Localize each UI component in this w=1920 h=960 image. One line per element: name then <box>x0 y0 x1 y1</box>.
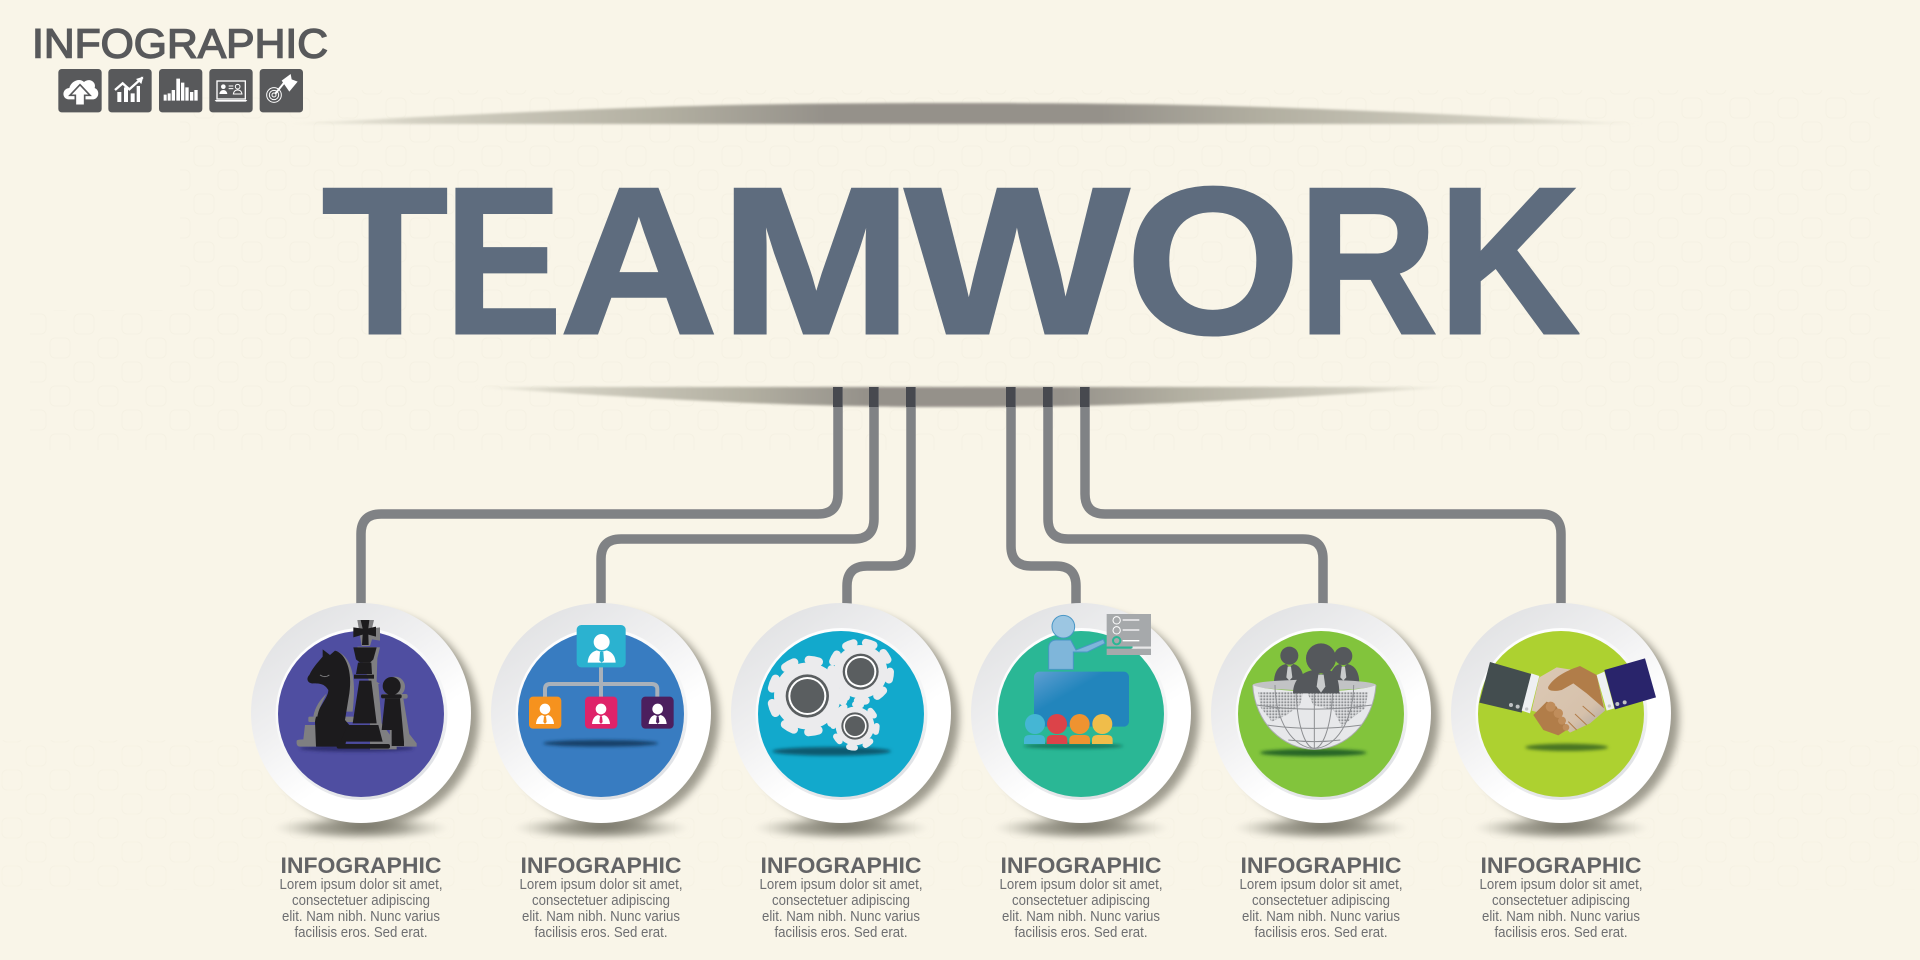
circle 5: global team <box>1211 603 1439 841</box>
title: TEAMWORK: A <box>560 145 718 378</box>
caption 1: Lorem ipsum dolor sit amet, <box>280 877 442 893</box>
top box <box>577 625 626 667</box>
icon: handshake <box>1479 658 1656 751</box>
pipe to circle 4 <box>1011 387 1076 606</box>
half globe <box>1252 680 1376 750</box>
caption 4: INFOGRAPHIC <box>1000 853 1162 878</box>
caption 5: INFOGRAPHIC <box>1240 853 1402 878</box>
caption 4: facilisis eros. Sed erat. <box>1014 925 1148 941</box>
caption 6: INFOGRAPHIC <box>1480 853 1642 878</box>
connector pipes <box>361 387 1561 606</box>
caption 1: facilisis eros. Sed erat. <box>294 925 428 941</box>
audience <box>1024 714 1113 744</box>
circle 1: strategy chess <box>251 603 479 841</box>
caption 2 <box>520 853 682 941</box>
icon: laptop presentation <box>209 69 253 112</box>
caption 4: Lorem ipsum dolor sit amet, <box>1000 877 1162 893</box>
caption 5: facilisis eros. Sed erat. <box>1254 925 1388 941</box>
icon: chess pieces <box>297 620 417 752</box>
checklist board <box>1107 614 1151 655</box>
caption 4: elit. Nam nibh. Nunc varius <box>1002 909 1160 925</box>
pipe to circle 1 <box>361 387 838 606</box>
icon: presenter and audience <box>1023 614 1151 749</box>
caption 5: consectetuer adipiscing <box>1252 893 1390 909</box>
caption 2: facilisis eros. Sed erat. <box>534 925 668 941</box>
gear lower <box>833 704 877 748</box>
caption 2: INFOGRAPHIC <box>520 853 682 878</box>
icon: org chart <box>529 625 674 747</box>
orange box <box>529 697 561 729</box>
caption 3 <box>760 853 922 941</box>
gear large <box>771 660 843 732</box>
circle 4: presentation <box>971 603 1199 841</box>
icon: growth chart <box>108 69 152 112</box>
icon: three gears <box>771 642 891 756</box>
logo: INFOGRAPHIC wordmark: INFOGRAPHIC <box>32 20 328 66</box>
left sleeve <box>1479 662 1539 713</box>
icon: target with arrow <box>260 69 303 112</box>
caption 3: elit. Nam nibh. Nunc varius <box>762 909 920 925</box>
circle 2: organisation chart <box>491 603 719 841</box>
title: TEAMWORK: W <box>905 145 1129 378</box>
side people <box>1274 647 1359 683</box>
right sleeve <box>1597 658 1656 711</box>
purple box <box>641 697 674 729</box>
circle 3: gears <box>731 603 959 841</box>
logo icon row <box>58 69 303 112</box>
caption 3: Lorem ipsum dolor sit amet, <box>760 877 922 893</box>
caption 4 <box>1000 853 1162 941</box>
circle 6: handshake <box>1451 603 1679 841</box>
caption 1: INFOGRAPHIC <box>280 853 442 878</box>
pipe to circle 6 <box>1085 387 1561 606</box>
title: TEAMWORK: K <box>1438 145 1579 378</box>
caption 3: facilisis eros. Sed erat. <box>774 925 908 941</box>
caption 5: elit. Nam nibh. Nunc varius <box>1242 909 1400 925</box>
pipe to circle 2 <box>601 387 874 606</box>
icon: team over half globe <box>1252 643 1376 759</box>
caption 2: consectetuer adipiscing <box>532 893 670 909</box>
title: TEAMWORK: O <box>1126 145 1300 378</box>
icon: bar chart <box>159 69 202 112</box>
caption 6: Lorem ipsum dolor sit amet, <box>1480 877 1642 893</box>
caption 5: Lorem ipsum dolor sit amet, <box>1240 877 1402 893</box>
caption 1: elit. Nam nibh. Nunc varius <box>282 909 440 925</box>
title: TEAMWORK: M <box>720 145 912 378</box>
title: TEAMWORK: T <box>322 145 448 378</box>
top lens shadow <box>280 103 1647 124</box>
title: TEAMWORK: E <box>445 145 562 378</box>
bottom lens shadow <box>472 387 1455 407</box>
caption 1 <box>280 853 442 941</box>
pipe to circle 5 <box>1048 387 1323 606</box>
presenter <box>1049 615 1105 669</box>
pink box <box>585 697 617 729</box>
caption 6: elit. Nam nibh. Nunc varius <box>1482 909 1640 925</box>
title: TEAMWORK: R <box>1298 145 1437 378</box>
caption 4: consectetuer adipiscing <box>1012 893 1150 909</box>
caption 5 <box>1240 853 1402 941</box>
gear upper right <box>831 642 890 701</box>
caption 3: consectetuer adipiscing <box>772 893 910 909</box>
caption 6: consectetuer adipiscing <box>1492 893 1630 909</box>
caption 6: facilisis eros. Sed erat. <box>1494 925 1628 941</box>
caption 2: elit. Nam nibh. Nunc varius <box>522 909 680 925</box>
title: TEAMWORK <box>322 145 1580 378</box>
caption 3: INFOGRAPHIC <box>760 853 922 878</box>
pipe to circle 3 <box>847 387 911 606</box>
icon: cloud upload <box>58 69 102 112</box>
caption 1: consectetuer adipiscing <box>292 893 430 909</box>
caption 6 <box>1480 853 1642 941</box>
caption 2: Lorem ipsum dolor sit amet, <box>520 877 682 893</box>
lead person <box>1293 643 1339 693</box>
